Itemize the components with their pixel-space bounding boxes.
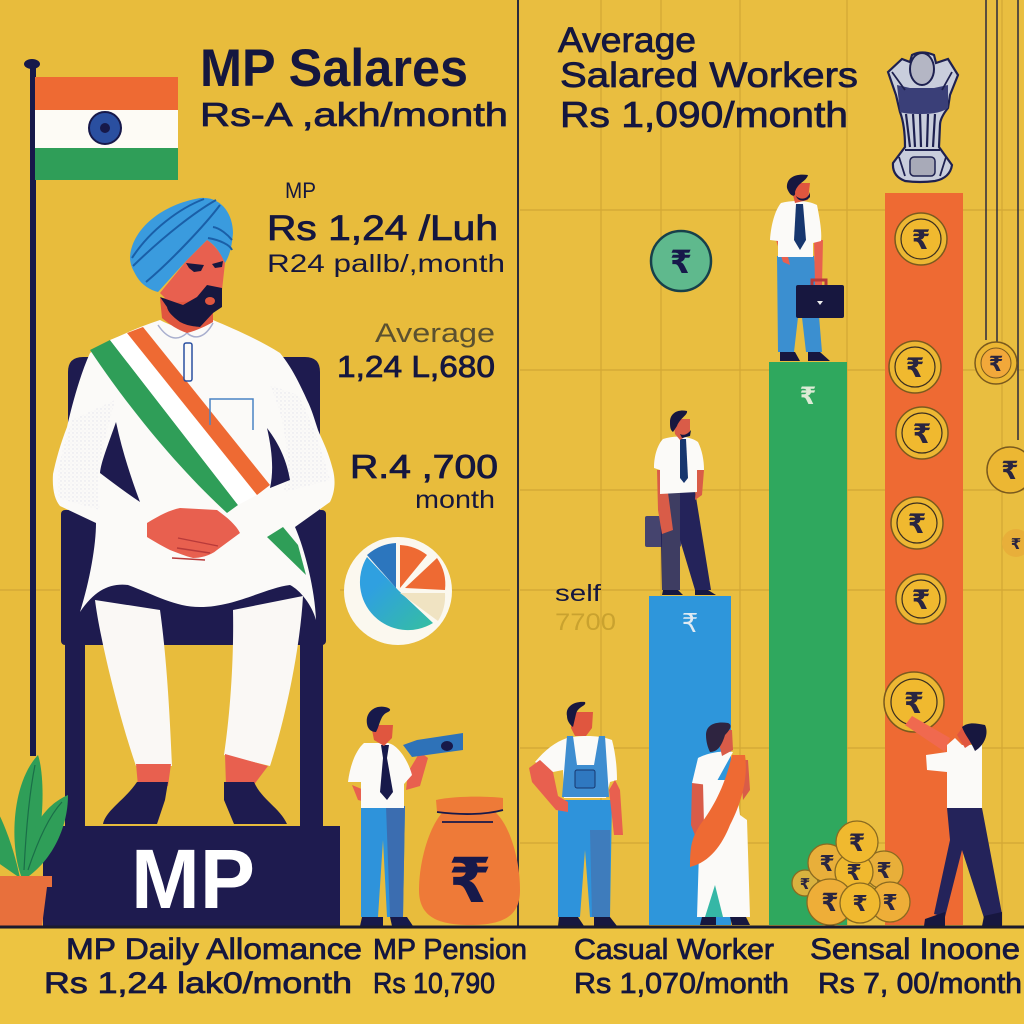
socks: [136, 754, 268, 786]
shoes: [103, 782, 287, 824]
bottom right coin: ₹: [882, 891, 898, 916]
MP pedestal: [43, 826, 340, 927]
hands: [147, 508, 240, 558]
turban: [130, 198, 233, 292]
coin 4: [891, 497, 943, 549]
self label: self: [555, 580, 602, 606]
man reaching for coin: [905, 716, 1002, 926]
text block: MP figure: Rs 1,24 /Luh: [267, 209, 498, 248]
collar: [158, 323, 213, 338]
top coin: ₹: [849, 829, 865, 857]
label: seasonal income: [810, 933, 1022, 1000]
coin 3: ₹: [913, 419, 931, 450]
hanging coin 3: [1002, 529, 1024, 557]
label: seasonal income: Sensal Inoone: [810, 933, 1020, 966]
plant in pot: [0, 755, 68, 926]
green bar: salaried: ₹: [800, 382, 816, 410]
sash tail: [267, 527, 306, 575]
money bag: [419, 797, 520, 925]
arm stipple: [58, 385, 330, 510]
chair: [61, 357, 326, 828]
text block: MP figure: [267, 178, 505, 278]
self label: [555, 580, 616, 636]
bottom left coin: ₹: [821, 888, 839, 917]
coin 3: [896, 407, 948, 459]
bottom centre coin: ₹: [852, 892, 868, 917]
beard: [160, 285, 222, 327]
worker in overalls: [529, 702, 623, 926]
coin 5: [896, 574, 946, 624]
right coin: ₹: [876, 859, 892, 884]
coin 5: ₹: [912, 585, 930, 616]
chin patch: [205, 297, 215, 305]
title: average salaried workers: [558, 21, 858, 135]
coin 1: [895, 213, 947, 265]
title: average salaried workers: Rs 1,090/month: [560, 94, 848, 135]
MP pedestal: MP: [131, 832, 255, 926]
face: [160, 240, 225, 303]
coin 4: ₹: [908, 509, 926, 540]
label: MP daily allowance: [44, 933, 362, 1000]
text block: MP figure: R24 pallb/,month: [267, 250, 505, 278]
pie chart: [344, 537, 452, 645]
centre coin: ₹: [846, 861, 862, 886]
neck: [160, 298, 213, 333]
self-employed man: [645, 410, 716, 595]
pocket: [210, 399, 253, 430]
title: average salaried workers: Salared Workers: [560, 56, 858, 95]
salaried man with briefcase: [770, 175, 844, 361]
eyes: [186, 261, 223, 272]
label: MP pension: MP Pension: [373, 934, 527, 966]
title: MP salary: MP Salares: [200, 39, 468, 98]
trousers: [95, 596, 303, 766]
hanging coin 2: ₹: [1001, 456, 1019, 485]
orange bar with coins: [884, 193, 963, 925]
text block: 700 figure: R.4 ,700: [350, 448, 498, 485]
coin 6: ₹: [904, 686, 924, 720]
label: casual worker: [574, 934, 789, 1000]
arm gaps: [100, 422, 290, 502]
sash green: [90, 340, 238, 513]
label: seasonal income: Rs 7, 00/month: [818, 968, 1022, 1000]
title: MP salary: Rs-A ,akh/month: [200, 96, 508, 133]
flag of India on pole: [24, 59, 178, 756]
kurta: [53, 320, 335, 620]
text block: 700 figure: month: [415, 486, 495, 514]
label: casual worker: Rs 1,070/month: [574, 968, 789, 1000]
man holding cash: [348, 707, 463, 926]
coin 1: ₹: [912, 225, 930, 256]
label: casual worker: Casual Worker: [574, 934, 774, 966]
coin 2: ₹: [906, 353, 924, 384]
left coin: ₹: [819, 852, 835, 877]
MP seated figure: [53, 198, 335, 824]
text block: average figure: [337, 318, 495, 384]
hanging coin 3: ₹: [1011, 535, 1021, 553]
title: average salaried workers: Average: [558, 21, 696, 60]
money bag: ₹: [448, 844, 492, 917]
coin 2: [889, 341, 941, 393]
label: MP daily allowance: MP Daily Allomance: [66, 933, 362, 966]
label: MP pension: [373, 934, 527, 1000]
coin pile: [792, 821, 910, 925]
hanging coin 2: [987, 447, 1024, 493]
title: MP salary: [200, 39, 508, 133]
woman in sari: [690, 722, 750, 925]
coin 6: [884, 672, 944, 732]
hanging strings with coins: [975, 0, 1024, 557]
hanging coin 1: ₹: [989, 352, 1003, 376]
icon: national emblem: [888, 52, 958, 182]
back coin: ₹: [800, 875, 810, 893]
sash orange: [127, 327, 270, 495]
text block: average figure: 1,24 L,680: [337, 349, 495, 384]
placket: [184, 343, 192, 381]
text block: 700 figure: [350, 448, 498, 514]
label: MP daily allowance: Rs 1,24 lak0/month: [44, 967, 352, 1000]
icon: rupee coin green: ₹: [670, 243, 692, 281]
label: MP pension: Rs 10,790: [373, 968, 495, 1000]
sash white: [110, 333, 257, 505]
blue bar: self employed: [649, 596, 731, 925]
hanging coin 1: [975, 342, 1017, 384]
green bar: salaried: [769, 362, 847, 925]
self label: 7700: [555, 609, 616, 636]
text block: MP figure: MP: [285, 178, 316, 203]
icon: rupee coin green: [651, 231, 711, 291]
text block: average figure: Average: [375, 318, 495, 348]
blue bar: self employed: ₹: [682, 608, 698, 638]
